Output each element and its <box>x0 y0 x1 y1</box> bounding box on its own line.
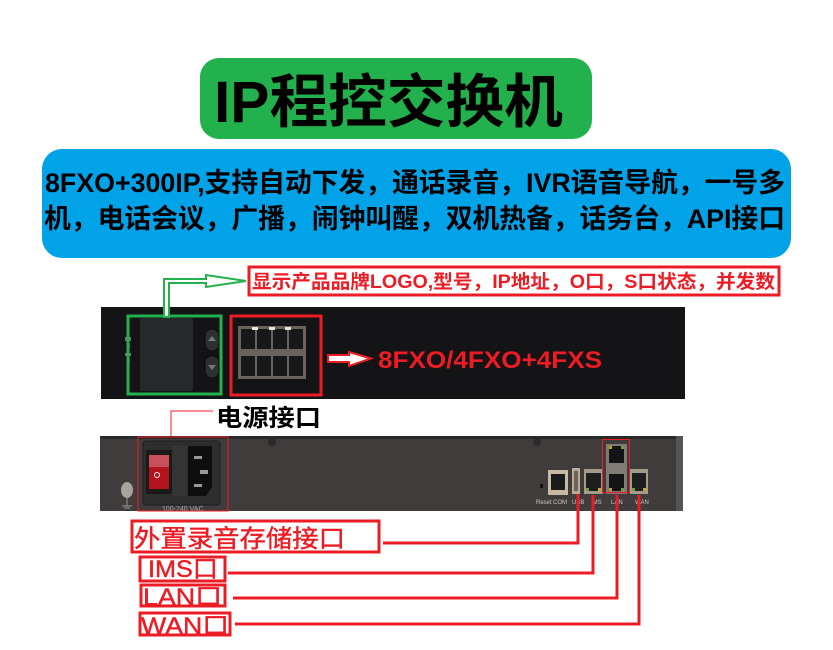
label: lan port: LAN口 <box>143 584 222 611</box>
port labels <box>536 500 649 506</box>
port labels: USB <box>572 500 584 506</box>
description banner: 机，电话会议，广播，闹钟叫醒，双机热备，话务台，API接口 <box>44 203 785 234</box>
power module: 100-240 VAC <box>162 506 204 513</box>
label: power port: 电源接口 <box>216 405 321 432</box>
title: IP程控交换机 <box>214 70 563 135</box>
connector: ims port <box>228 495 593 573</box>
port labels: IMS <box>591 500 602 506</box>
front panel <box>101 307 685 399</box>
port labels: WAN <box>635 500 649 506</box>
screw <box>268 438 276 446</box>
lan ports <box>606 444 627 494</box>
connector: wan port <box>235 495 639 624</box>
connector: lan port <box>233 495 617 598</box>
highlight: power module <box>138 437 228 511</box>
wan port <box>630 469 648 494</box>
port labels: COM <box>553 500 567 506</box>
label: ims port: IMS口 <box>148 556 218 583</box>
navigation buttons <box>205 329 219 378</box>
rear panel <box>100 436 683 513</box>
label: fxo ports: 8FXO/4FXO+4FXS <box>378 347 602 374</box>
usb port <box>572 468 580 494</box>
label: wan port: WAN口 <box>141 613 229 640</box>
label: storage port: 外置录音存储接口 <box>134 525 345 553</box>
label: storage port <box>132 521 379 553</box>
arrow: fxo ports to label <box>328 352 371 366</box>
port labels: LAN <box>611 500 623 506</box>
ground terminal <box>121 482 133 508</box>
fxo ports <box>238 326 306 379</box>
description banner: 8FXO+300IP,支持自动下发，通话录音，IVR语音导航，一号多 <box>45 168 785 198</box>
port labels: Reset <box>536 500 552 506</box>
arrow: display to callout <box>164 275 246 317</box>
callout: display info: 显示产品品牌LOGO,型号，IP地址，O口，S口状态，并发数 <box>252 270 775 293</box>
description banner <box>42 149 791 258</box>
power label leader <box>171 411 213 437</box>
highlight: display area <box>128 316 221 394</box>
ims port <box>584 469 603 494</box>
com port <box>548 470 568 495</box>
reset button <box>540 484 543 488</box>
highlight: fxo ports <box>231 316 321 395</box>
highlight: lan ports <box>602 440 630 492</box>
status leds <box>125 337 131 363</box>
lcd screen <box>140 318 193 391</box>
power module <box>143 441 220 513</box>
connector: storage port <box>383 494 578 543</box>
